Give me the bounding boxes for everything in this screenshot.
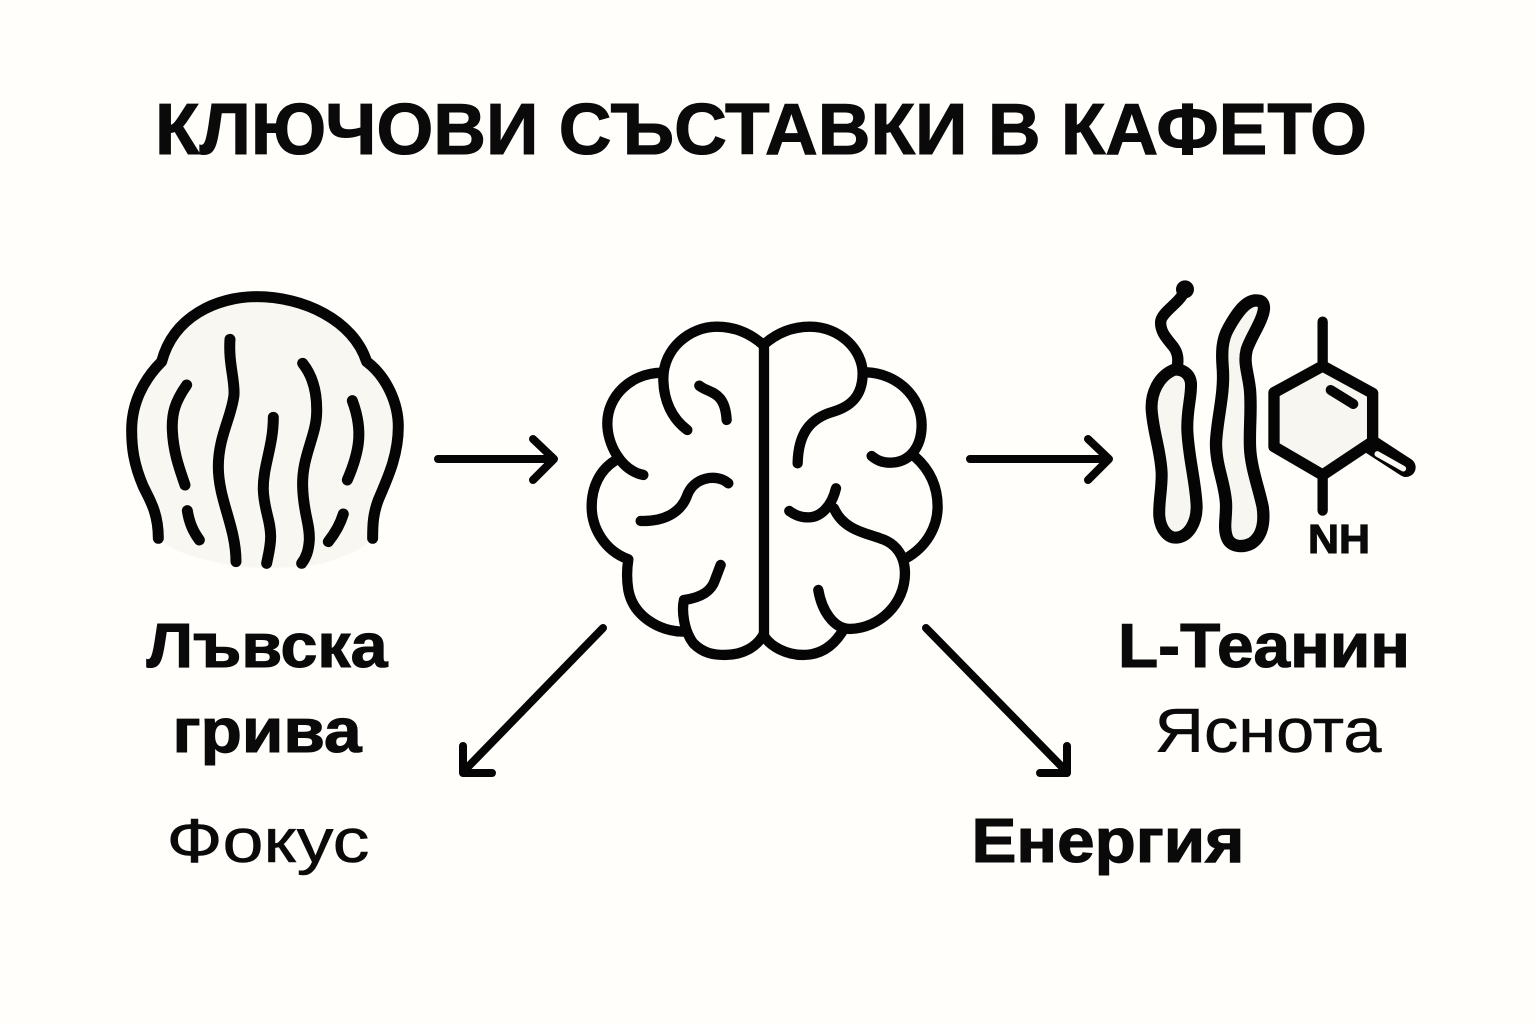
- label: lion's mane: [146, 612, 388, 766]
- label: lion's mane: Лъвска: [146, 612, 388, 681]
- label: NH: NH: [1308, 516, 1370, 562]
- arrow: brain to energy: [926, 628, 1067, 773]
- label: clarity: Яснота: [1154, 697, 1382, 766]
- title: КЛЮЧОВИ СЪСТАВКИ В КАФЕТО: [155, 90, 1367, 170]
- molecule side bond: [1372, 445, 1406, 467]
- arrow: L-theanine to brain direction: [970, 439, 1109, 480]
- double bond: [1331, 390, 1353, 404]
- label: focus: Фокус: [166, 807, 370, 876]
- icon: lion's mane mushroom: [132, 297, 398, 568]
- icon: L-theanine plant and molecule: [1152, 280, 1406, 546]
- stem tip: [1176, 280, 1194, 298]
- icon: brain: [592, 327, 938, 655]
- leaf shape two: [1216, 300, 1264, 546]
- leaf shape one: [1152, 370, 1197, 538]
- label: energy: Енергия: [972, 807, 1244, 876]
- top and bottom bonds: [1307, 322, 1338, 511]
- label: L-theanine: L-Теанин: [1118, 612, 1410, 681]
- arrow: lion's mane to brain: [438, 439, 554, 480]
- stem: [1161, 290, 1185, 367]
- label: lion's mane: грива: [172, 697, 362, 766]
- arrow: brain to focus: [463, 628, 603, 773]
- hexagon ring: [1274, 366, 1373, 475]
